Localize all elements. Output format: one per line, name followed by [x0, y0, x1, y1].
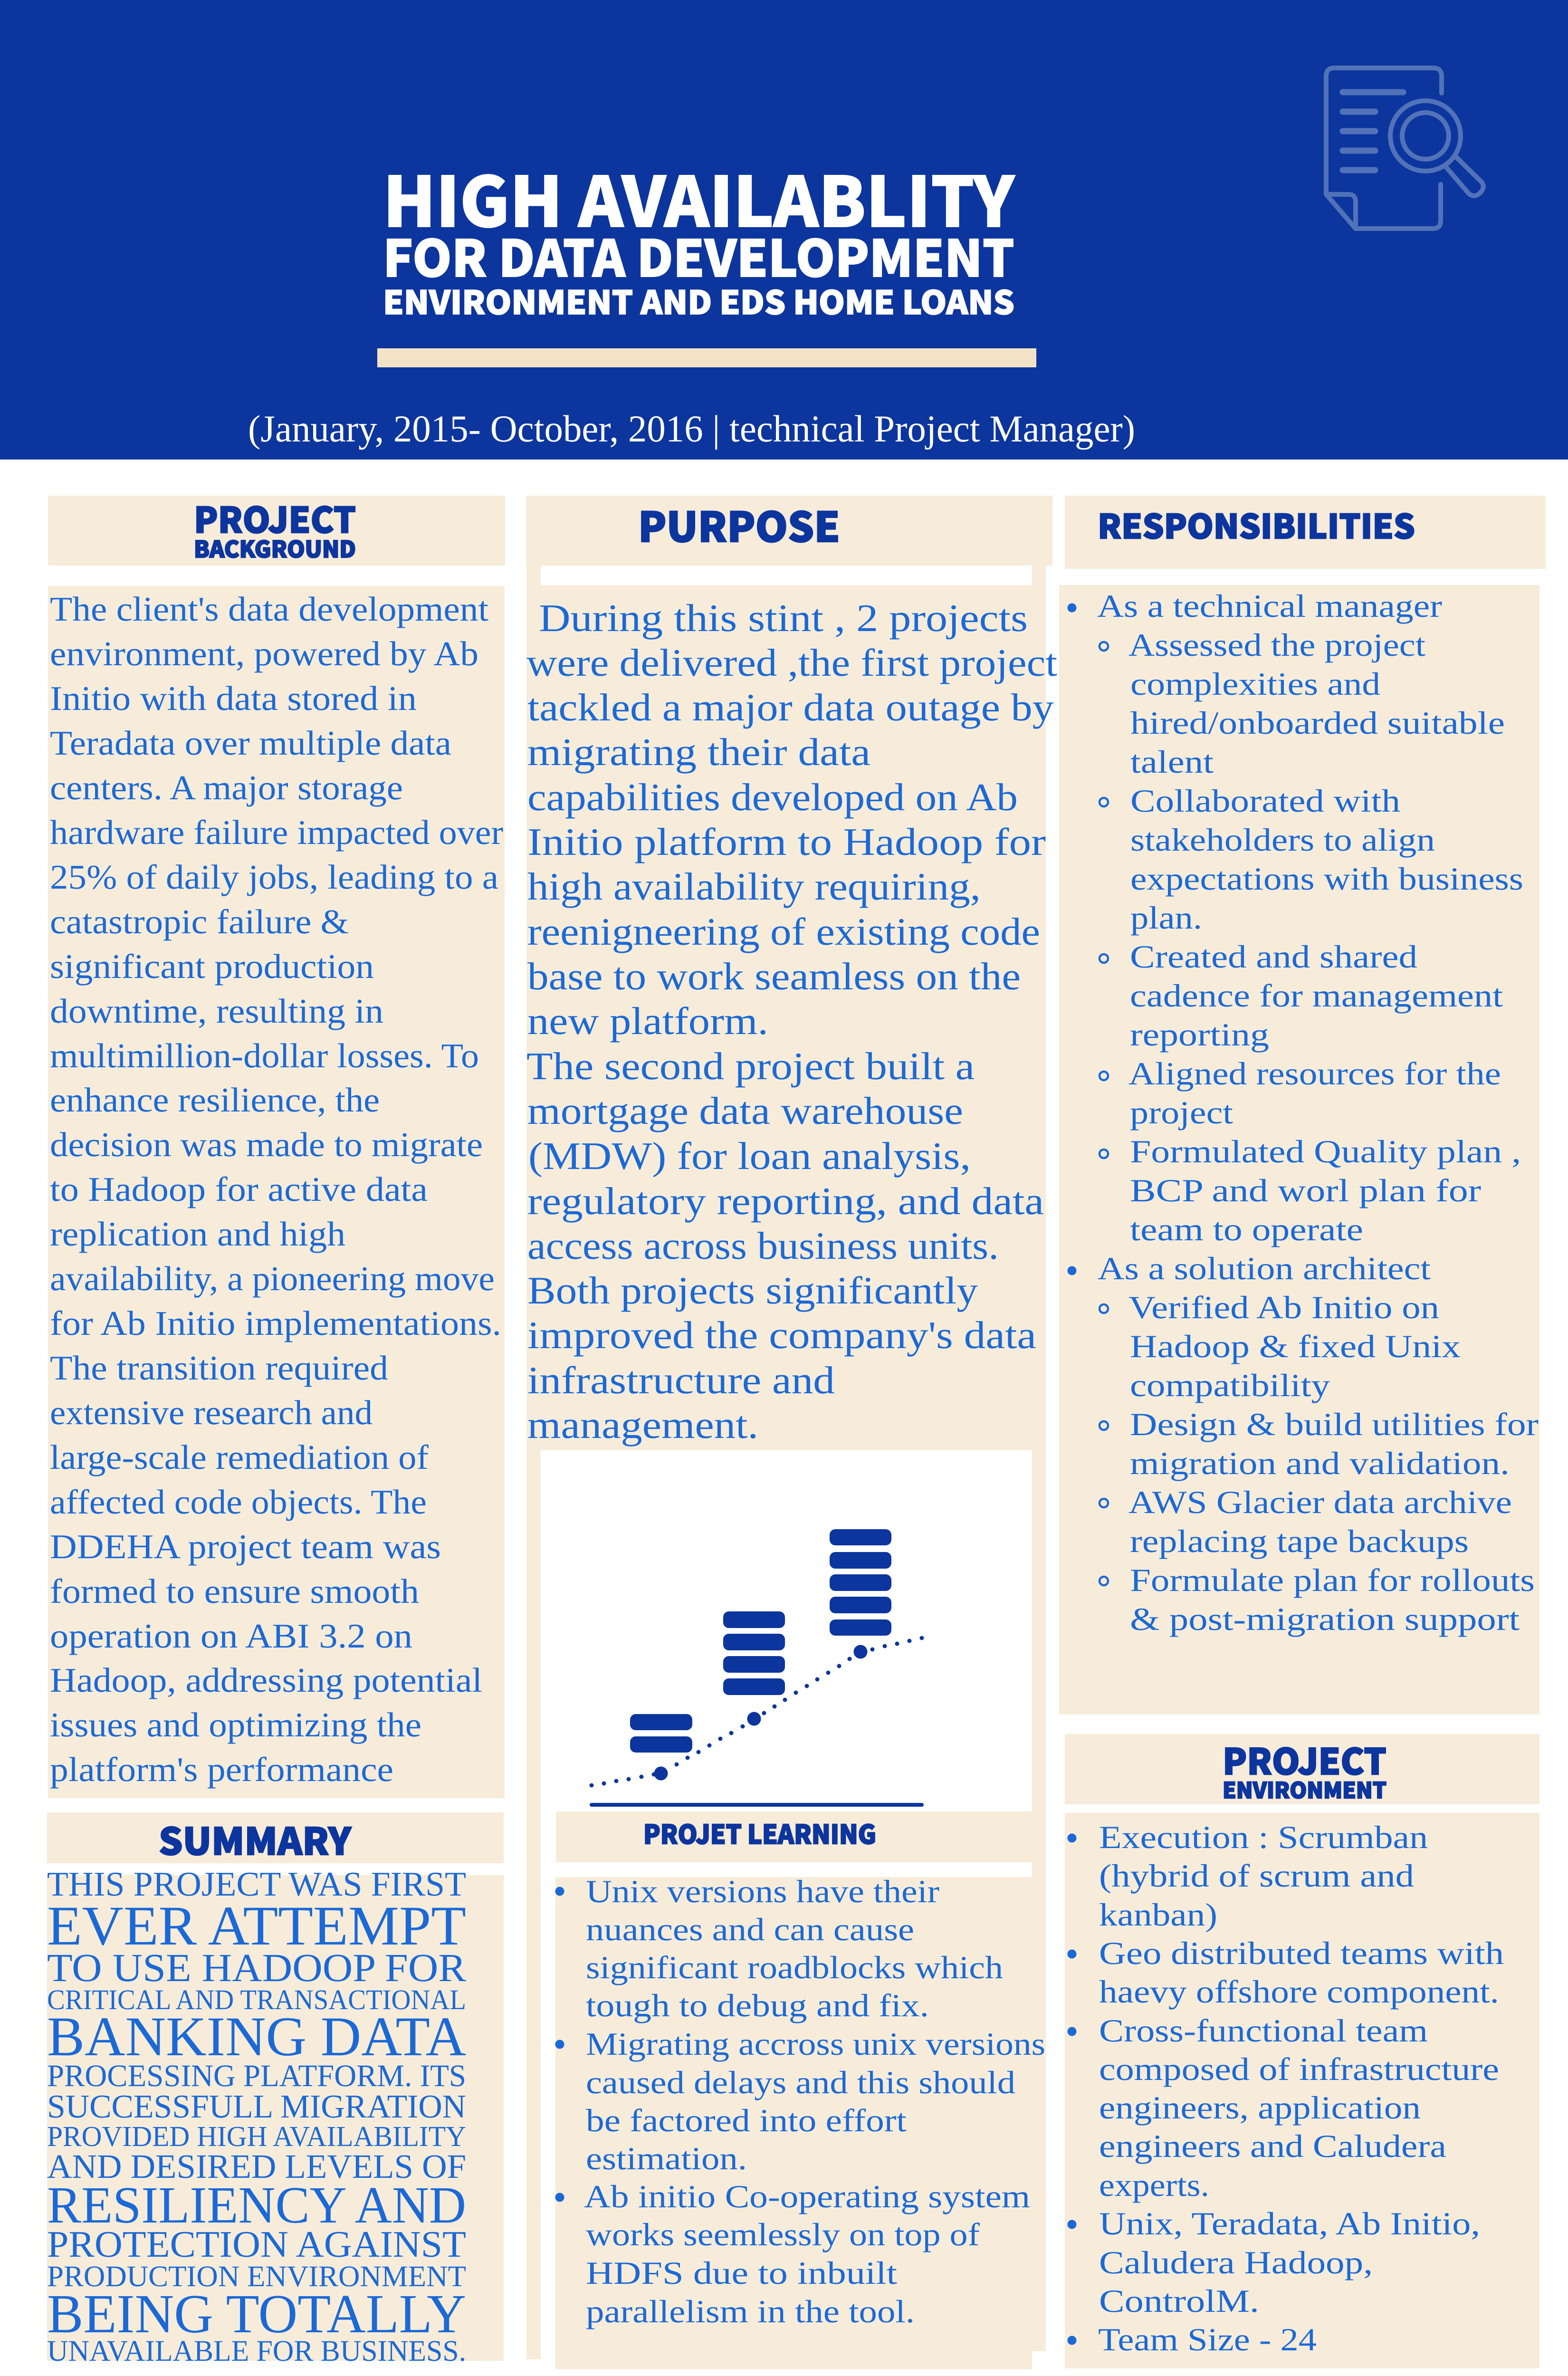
text block: summary word stack: RESILIENCY AND	[47, 2176, 466, 2234]
panel: responsibilities	[1059, 496, 1546, 1715]
text block: project background body: Initio with data stored in	[50, 679, 417, 718]
text block: purpose body: high availability requiring,	[527, 865, 981, 908]
text block: project background body: centers. A major storage	[50, 768, 403, 807]
text block: project background body: DDEHA project team was	[50, 1527, 441, 1566]
panel: project environment	[1065, 1733, 1539, 2368]
icon: document with magnifier	[1326, 68, 1483, 229]
text block: summary word stack: PRODUCTION ENVIRONMENT	[47, 2260, 466, 2293]
text block: project background body: Hadoop, addressing potential	[50, 1661, 482, 1699]
heading: project environment	[1065, 1733, 1539, 1805]
text block: responsibilities list: Aligned resources for the	[1128, 1055, 1501, 1092]
text block: purpose body: During this stint , 2 projects	[539, 596, 1028, 640]
text block: purpose body: migrating their data	[527, 730, 870, 774]
text block: responsibilities list: stakeholders to align	[1130, 822, 1435, 858]
text block: project learning list	[555, 1873, 1046, 2369]
side strips of the purpose column	[526, 565, 1046, 2359]
text block: project background body: The client's data development	[50, 590, 488, 628]
text block: project background body: affected code objects. The	[50, 1483, 427, 1521]
text block: purpose body: The second project built a	[526, 1044, 975, 1088]
text block: responsibilities list: Design & build utilities for	[1130, 1406, 1539, 1442]
text block: project learning list: Ab initio Co-operating system	[584, 2178, 1030, 2214]
text block: summary word stack: SUCCESSFULL MIGRATION	[47, 2089, 466, 2125]
text block: project environment list: engineers and Caludera	[1099, 2128, 1446, 2164]
text block: responsibilities list: Formulated Quality plan ,	[1130, 1133, 1521, 1169]
text block: purpose body: new platform.	[527, 999, 768, 1043]
text block: purpose body: improved the company's data	[527, 1313, 1036, 1357]
text block: purpose body: reenigneering of existing code	[527, 910, 1040, 953]
text block: summary word stack: PROVIDED HIGH AVAILABILITY	[47, 2121, 466, 2153]
text block: project learning list: nuances and can cause	[586, 1911, 914, 1947]
text block: purpose body	[526, 585, 1057, 1450]
text block: summary word stack	[47, 1865, 504, 2367]
text block: responsibilities list: project	[1130, 1094, 1233, 1131]
text block: project background body: operation on ABI 3.2 on	[50, 1617, 412, 1655]
heading: purpose	[526, 494, 1052, 565]
text block: responsibilities list: team to operate	[1130, 1211, 1363, 1247]
text block: responsibilities list: As a technical manager	[1097, 588, 1442, 624]
heading: project learning: PROJET LEARNING	[643, 1813, 876, 1851]
text block: project background body: downtime, resulting in	[50, 992, 383, 1030]
text block: project environment list	[1065, 1813, 1539, 2368]
text block: project environment list: haevy offshore component.	[1099, 1974, 1499, 2010]
title: ENVIRONMENT AND EDS HOME LOANS	[383, 277, 1014, 324]
text block: project environment list: Unix, Teradata, Ab Initio,	[1099, 2205, 1480, 2242]
text block: summary word stack: PROCESSING PLATFORM. ITS	[47, 2059, 466, 2093]
text block: project environment list: kanban)	[1099, 1897, 1217, 1933]
text block: responsibilities list: talent	[1130, 744, 1214, 780]
text block: purpose body: (MDW) for loan analysis,	[528, 1134, 971, 1178]
title	[383, 147, 1015, 324]
heading: summary	[47, 1812, 504, 1866]
text block: project background body: platform's performance	[50, 1750, 393, 1789]
text block: summary word stack: AND DESIRED LEVELS OF	[47, 2147, 466, 2185]
text block: responsibilities list: cadence for management	[1130, 977, 1503, 1014]
text block: responsibilities list: Assessed the project	[1128, 627, 1425, 663]
text block: project learning list: estimation.	[586, 2140, 747, 2176]
text block: project background body: environment, powered by Ab	[50, 634, 478, 673]
text block: responsibilities list	[1059, 585, 1539, 1715]
text block: purpose body: Both projects significantly	[527, 1269, 978, 1312]
text block: project learning list: Migrating accross unix versions	[586, 2026, 1045, 2062]
text block: responsibilities list: & post-migration support	[1130, 1601, 1520, 1637]
text block: project environment list: ControlM.	[1099, 2283, 1259, 2319]
text block: summary word stack: CRITICAL AND TRANSACTIONAL	[47, 1984, 466, 2015]
panel: summary	[47, 1812, 504, 2367]
heading: purpose: PURPOSE	[638, 494, 840, 554]
heading: project background: BACKGROUND	[194, 531, 356, 564]
text block: responsibilities list: Hadoop & fixed Unix	[1130, 1328, 1461, 1364]
text block: responsibilities list: As a solution architect	[1098, 1250, 1431, 1286]
text block: project background body: for Ab Initio implementations.	[50, 1304, 501, 1342]
text block: project background body: Teradata over multiple data	[50, 724, 451, 762]
text block: project background body: large-scale remediation of	[50, 1438, 429, 1476]
heading: project background	[48, 492, 505, 565]
text block: responsibilities list: hired/onboarded suitable	[1130, 705, 1505, 741]
title: FOR DATA DEVELOPMENT	[383, 218, 1014, 291]
text block: project background body: 25% of daily jobs, leading to a	[50, 858, 498, 896]
text block: project background body	[48, 586, 505, 1798]
title accent bar	[377, 348, 1036, 367]
text block: project background body: replication and high	[50, 1215, 345, 1253]
chart: rising data stacks with dotted trend line	[541, 1450, 1032, 1811]
text block: project background body: availability, a pioneering move	[50, 1259, 495, 1298]
heading: summary: SUMMARY	[159, 1812, 352, 1866]
text block: project background body: The transition required	[50, 1349, 388, 1387]
text block: project environment list: Team Size - 24	[1098, 2321, 1317, 2357]
text block: purpose body: regulatory reporting, and data	[527, 1179, 1044, 1223]
text block: responsibilities list: Collaborated with	[1130, 783, 1400, 819]
heading: project environment: PROJECT	[1223, 1733, 1386, 1785]
text block: purpose body: management.	[527, 1403, 758, 1447]
text block: project learning list: be factored into effort	[586, 2102, 907, 2138]
text block: project background body: formed to ensure smooth	[50, 1572, 419, 1610]
text block: summary word stack: BEING TOTALLY	[47, 2284, 466, 2345]
text block: summary word stack: TO USE HADOOP FOR	[47, 1946, 466, 1990]
text block: summary word stack: UNAVAILABLE FOR BUSINESS.	[47, 2334, 466, 2367]
text block: summary word stack: PROTECTION AGAINST	[47, 2224, 466, 2265]
text block: responsibilities list: migration and validation.	[1130, 1445, 1510, 1481]
text block: project background body: decision was made to migrate	[50, 1125, 483, 1164]
text block: summary word stack: THIS PROJECT WAS FIRST	[47, 1865, 466, 1903]
text block: project background body: to Hadoop for active data	[50, 1170, 428, 1208]
text block: project background body: extensive research and	[50, 1393, 373, 1432]
text block: purpose body: tackled a major data outage by	[527, 686, 1054, 729]
text block: project background body: enhance resilience, the	[50, 1081, 380, 1119]
text block: responsibilities list: AWS Glacier data archive	[1128, 1484, 1512, 1520]
text block: summary word stack: EVER ATTEMPT	[47, 1895, 466, 1957]
text block: responsibilities list: reporting	[1130, 1016, 1269, 1053]
text block: project environment list: Execution : Scrumban	[1099, 1819, 1428, 1855]
heading: responsibilities	[1065, 496, 1546, 569]
title: HIGH AVAILABLITY	[383, 147, 1015, 247]
text block: project learning list: HDFS due to inbuilt	[586, 2255, 897, 2291]
text block: responsibilities list: plan.	[1130, 900, 1202, 936]
heading: project environment: ENVIRONMENT	[1223, 1773, 1386, 1805]
text block: purpose body: infrastructure and	[527, 1359, 835, 1402]
text block: project learning list: significant roadblocks which	[586, 1949, 1003, 1985]
text block: responsibilities list: Verified Ab Initio on	[1128, 1289, 1439, 1325]
text block: project background body: significant production	[50, 947, 374, 986]
text block: project environment list: Caludera Hadoop,	[1099, 2244, 1373, 2280]
text block: responsibilities list: Formulate plan for rollouts	[1130, 1562, 1535, 1598]
text block: project learning list: caused delays and this should	[586, 2064, 1015, 2100]
text block: purpose body: base to work seamless on the	[527, 955, 1021, 998]
text block: responsibilities list: BCP and worl plan for	[1130, 1172, 1481, 1208]
text block: project environment list: (hybrid of scrum and	[1099, 1858, 1414, 1894]
heading: responsibilities: RESPONSIBILITIES	[1098, 500, 1415, 548]
text block: responsibilities list: complexities and	[1130, 666, 1380, 702]
text block: purpose body: access across business units.	[527, 1224, 999, 1267]
text block: project environment list: experts.	[1099, 2167, 1209, 2203]
text block: project background body: issues and optimizing the	[50, 1705, 421, 1744]
heading: project learning	[556, 1811, 1046, 1862]
panel: purpose	[526, 494, 1057, 2369]
text block: responsibilities list: compatibility	[1130, 1367, 1330, 1403]
text block: responsibilities list: replacing tape backups	[1130, 1523, 1469, 1559]
text block: project background body: multimillion-dollar losses. To	[50, 1036, 479, 1075]
panel: project background	[48, 492, 505, 1798]
text block: project background body: catastropic failure &	[50, 902, 349, 941]
text block: purpose body: were delivered ,the first project	[526, 641, 1057, 684]
text block: responsibilities list: Created and shared	[1130, 939, 1417, 975]
text block: project environment list: Cross-functional team	[1099, 2012, 1428, 2049]
text block: project background body: hardware failure impacted over	[50, 813, 503, 852]
text block: project environment list: engineers, application	[1099, 2089, 1421, 2126]
text block: project learning list: works seemlessly on top of	[586, 2216, 980, 2252]
text block: responsibilities list: expectations with business	[1130, 861, 1523, 897]
text block: purpose body: Initio platform to Hadoop for	[527, 820, 1046, 863]
text block: project environment list: composed of infrastructure	[1099, 2051, 1499, 2087]
subtitle: (January, 2015- October, 2016 | technical Project Manager)	[248, 408, 1135, 450]
text block: project learning list: tough to debug and fix.	[586, 1987, 929, 2023]
text block: project learning list: parallelism in the tool.	[586, 2293, 915, 2329]
text block: purpose body: capabilities developed on Ab	[527, 776, 1018, 819]
text block: project environment list: Geo distributed teams with	[1099, 1935, 1504, 1971]
text block: purpose body: mortgage data warehouse	[527, 1089, 963, 1132]
text block: summary word stack: BANKING DATA	[47, 2005, 466, 2068]
text block: project learning list: Unix versions have their	[586, 1873, 939, 1909]
heading: project background: PROJECT	[194, 492, 356, 543]
header banner	[0, 0, 1568, 460]
